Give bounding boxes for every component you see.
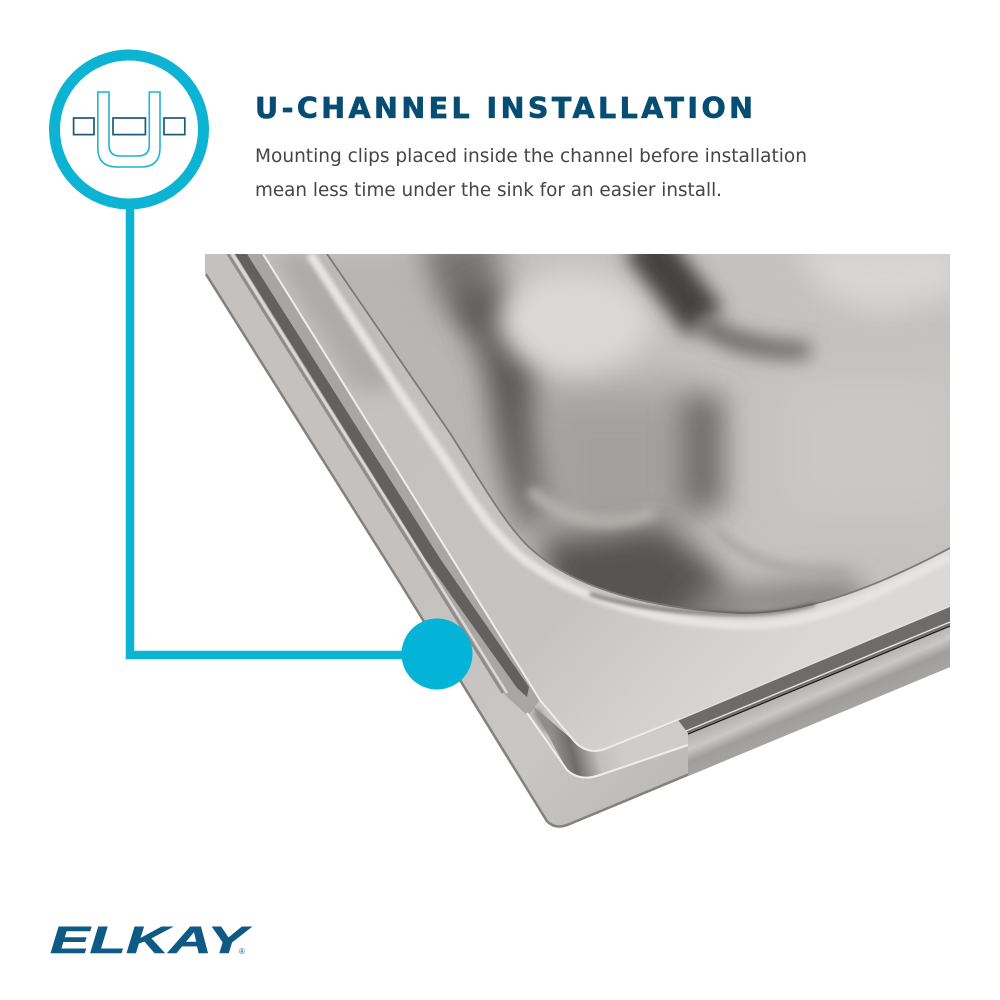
- step outer edge highlight: [527, 713, 688, 778]
- callout dot: [402, 618, 472, 690]
- bowl edge shadow line: [327, 254, 950, 613]
- right channel lower band: [688, 625, 950, 778]
- Elkay logo: [50, 920, 253, 962]
- rim highlight: [310, 254, 950, 625]
- callout leader line: [130, 205, 420, 655]
- deck shadow near top: [272, 254, 400, 390]
- sink photo illustration: [205, 240, 960, 828]
- left channel groove fill: [235, 254, 540, 716]
- description text: Mounting clips placed inside the channel before installation: [255, 145, 807, 167]
- flange dark edge: [205, 275, 950, 828]
- deck surface: [570, 549, 950, 750]
- mounting clips: [74, 118, 185, 135]
- description text: [255, 145, 807, 201]
- title: U-CHANNEL INSTALLATION: [255, 92, 753, 125]
- right channel groove: [678, 607, 950, 733]
- bowl bottom dark seam: [590, 594, 815, 614]
- deck edge highlight: [263, 254, 680, 751]
- left channel dark strip: [235, 254, 529, 697]
- badge ring: [54, 55, 204, 204]
- outer flange: [205, 254, 950, 828]
- step-down corner band: [532, 705, 688, 778]
- step corner shadow: [532, 708, 552, 732]
- Elkay logo: ELKAY: [50, 920, 253, 962]
- Elkay logo: ®: [239, 947, 245, 956]
- right channel edge lines: [678, 606, 950, 734]
- left channel lip: [228, 254, 507, 693]
- icon: U-channel badge: [54, 55, 204, 204]
- U-channel outline: [98, 92, 160, 167]
- description text: mean less time under the sink for an easier install.: [255, 179, 722, 201]
- bowl interior: [342, 254, 950, 612]
